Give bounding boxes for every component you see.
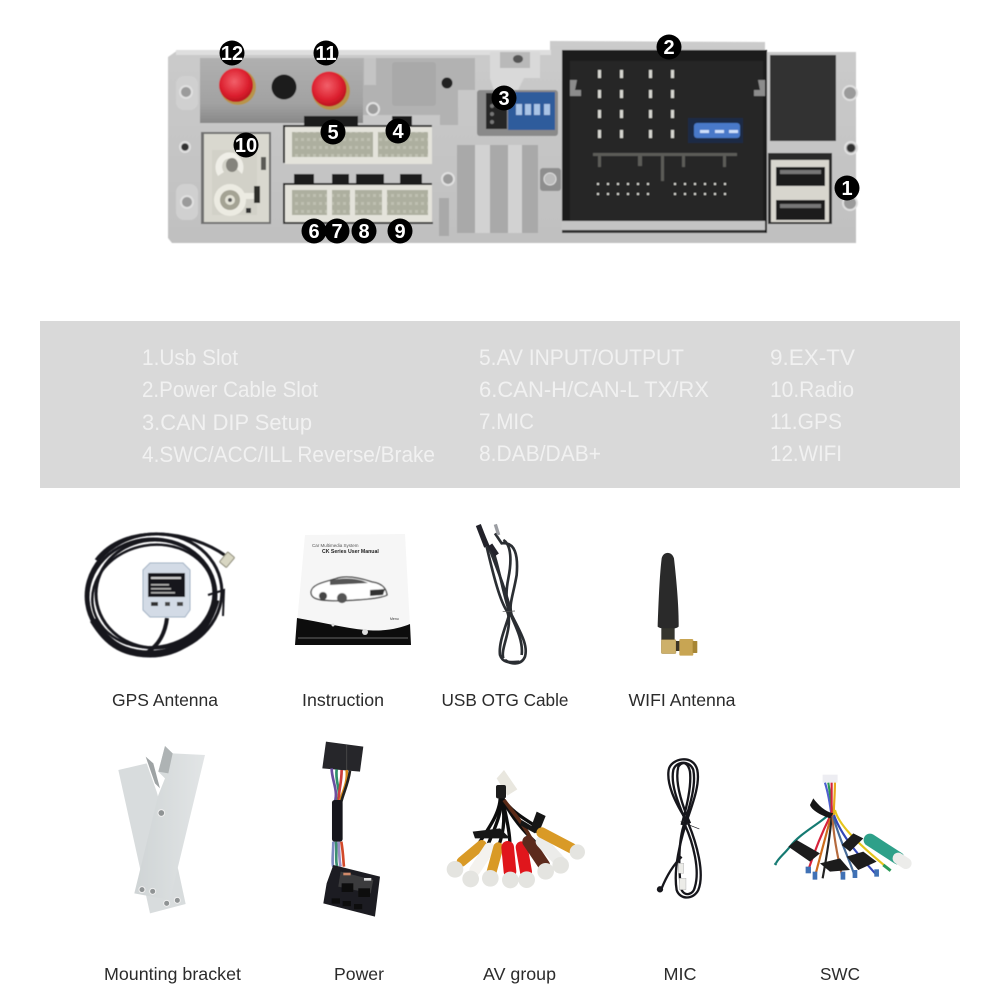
legend column 2: 8.DAB/DAB+: [479, 441, 601, 466]
upper grey block: [363, 58, 475, 125]
legend column 1: 1.Usb Slot: [142, 345, 238, 370]
lower ribs: [439, 145, 538, 236]
number badges: 4: [392, 121, 404, 143]
legend column 1: 3.CAN DIP Setup: [142, 410, 312, 435]
socket rib: [593, 153, 737, 181]
top light edge: [176, 50, 551, 55]
socket pins: [597, 70, 726, 195]
accessory: instruction manual: Menu: [390, 617, 399, 621]
caption: USB OTG Cable: USB OTG Cable: [442, 690, 568, 710]
number badges: 10: [235, 135, 257, 157]
caption: GPS Antenna: GPS Antenna: [112, 690, 218, 710]
accessory: MIC cable: [658, 759, 701, 897]
legend column 3: 10.Radio: [770, 377, 854, 402]
legend column 1: 4.SWC/ACC/ILL Reverse/Brake: [142, 442, 435, 467]
antenna connector 11: [312, 72, 350, 110]
number badges: [220, 34, 860, 244]
square cover plate: [392, 62, 436, 106]
number badges: 2: [663, 37, 675, 59]
dark grille: [770, 55, 836, 141]
manual cover text: CK Series User Manual: [322, 549, 379, 555]
accessory: GPS antenna: [78, 525, 235, 663]
caption: Mounting bracket: Mounting bracket: [104, 964, 241, 984]
legend column 1: [142, 345, 435, 467]
left edge notches: [176, 76, 198, 220]
number badges: 11: [315, 43, 337, 65]
black wave band: [295, 618, 411, 645]
number badges: 3: [498, 88, 510, 110]
accessory: mounting bracket: [118, 746, 205, 913]
bottom connector block: [283, 183, 432, 222]
legend column 2: 6.CAN-H/CAN-L TX/RX: [479, 377, 709, 402]
legend column 2: 5.AV INPUT/OUTPUT: [479, 345, 684, 370]
accessory: instruction manual: [295, 534, 411, 645]
caption: MIC: MIC: [664, 964, 696, 984]
legend column 3: 11.GPS: [770, 409, 842, 434]
accessory: AV group cable: [447, 770, 585, 888]
caption: SWC: SWC: [820, 964, 860, 984]
number badges: 12: [221, 43, 243, 65]
legend column 3: [770, 345, 855, 466]
accessory: USB OTG cable: [478, 524, 526, 663]
metal chassis: [168, 41, 856, 243]
notch: [364, 58, 376, 85]
caption: AV group: AV group: [483, 964, 556, 984]
legend column 2: 7.MIC: [479, 409, 534, 434]
legend column 1: 2.Power Cable Slot: [142, 377, 318, 402]
rear hole black: [272, 74, 296, 100]
caption: Instruction: Instruction: [302, 690, 384, 710]
blue fuse: [688, 118, 743, 143]
car illustration: [311, 577, 387, 603]
legend panel: [40, 321, 960, 488]
number badges: 8: [358, 221, 370, 243]
radio module: [201, 132, 271, 224]
caption: WIFI Antenna: WIFI Antenna: [628, 690, 736, 710]
USB ports: [768, 153, 832, 224]
accessory: power harness: [322, 742, 380, 917]
number badges: 7: [331, 221, 343, 243]
number badges: 6: [308, 221, 320, 243]
caption: Power: Power: [334, 964, 384, 984]
number badges: 5: [327, 122, 339, 144]
antenna connector 12: [220, 69, 256, 105]
accessory: SWC cable: [775, 775, 906, 880]
manual cover text: [312, 543, 379, 555]
DIP switch: [477, 90, 558, 136]
rear panel of head unit: [168, 34, 860, 244]
number badges: 9: [394, 221, 406, 243]
legend column 3: 9.EX-TV: [770, 345, 855, 370]
accessory: WIFI antenna: [658, 553, 697, 656]
top connector block: [283, 125, 432, 163]
legend column 2: [479, 345, 709, 466]
number badges: 1: [841, 178, 853, 200]
antenna recess: [200, 58, 363, 123]
hole: [442, 78, 452, 88]
top clip: [490, 52, 540, 90]
main power socket: [562, 50, 767, 233]
legend column 3: 12.WIFI: [770, 441, 842, 466]
screws: [180, 86, 857, 210]
manual cover text: Car Multimedia System: [312, 543, 359, 548]
